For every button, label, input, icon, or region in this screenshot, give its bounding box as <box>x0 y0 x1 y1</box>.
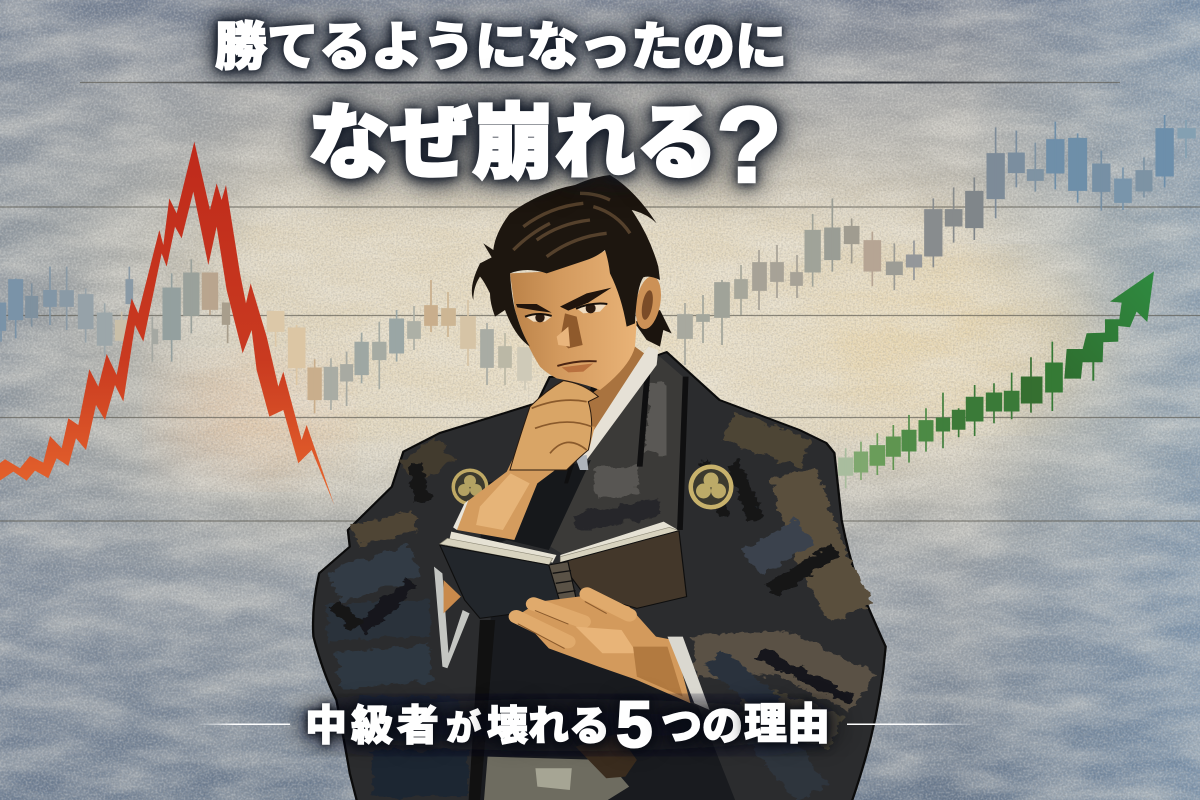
subtitle left rule <box>197 724 290 725</box>
subtitle: 理由 <box>744 701 830 749</box>
horizontal chart grid lines <box>0 82 1200 521</box>
robe brush strokes <box>327 427 863 793</box>
middle candlestick chart <box>408 245 802 390</box>
lower hand holding book <box>516 594 710 710</box>
raised arm with hand on chin <box>434 381 598 668</box>
mouth <box>557 361 597 366</box>
sash and sword hilt <box>484 733 637 800</box>
green rising candles and arrow <box>839 271 1154 488</box>
hair <box>472 175 660 347</box>
right crest <box>688 464 734 510</box>
subtitle: つの <box>661 703 743 749</box>
neck and collar <box>575 347 658 470</box>
title line two: なぜ崩れる <box>308 98 718 189</box>
subtitle: 壊れる <box>487 703 610 749</box>
shade behind subtitle <box>298 699 838 751</box>
right candlestick chart <box>805 115 1195 290</box>
subtitle: 5 <box>616 687 653 761</box>
subtitle: が <box>446 709 481 748</box>
eyes <box>526 314 552 322</box>
robe <box>313 352 886 800</box>
ear <box>632 274 665 331</box>
samurai figure <box>313 175 886 800</box>
arrow head <box>1064 271 1154 379</box>
title line two <box>288 77 802 206</box>
title line one: 勝てるようになったのに <box>215 19 787 77</box>
face <box>510 250 637 390</box>
subtitle right rule <box>847 724 975 725</box>
open book <box>440 522 687 618</box>
left candlestick chart <box>0 259 403 413</box>
red zigzag falling line <box>0 142 334 505</box>
kimono front panels <box>545 357 683 555</box>
crests <box>452 464 734 510</box>
brows <box>516 304 552 313</box>
subtitle <box>296 687 836 761</box>
left crest <box>452 468 488 506</box>
title line two: ? <box>716 84 782 205</box>
subtitle: 中級者 <box>305 702 443 749</box>
head <box>472 175 672 390</box>
back hair <box>635 310 672 347</box>
strong top rule under first title line <box>120 82 1080 84</box>
